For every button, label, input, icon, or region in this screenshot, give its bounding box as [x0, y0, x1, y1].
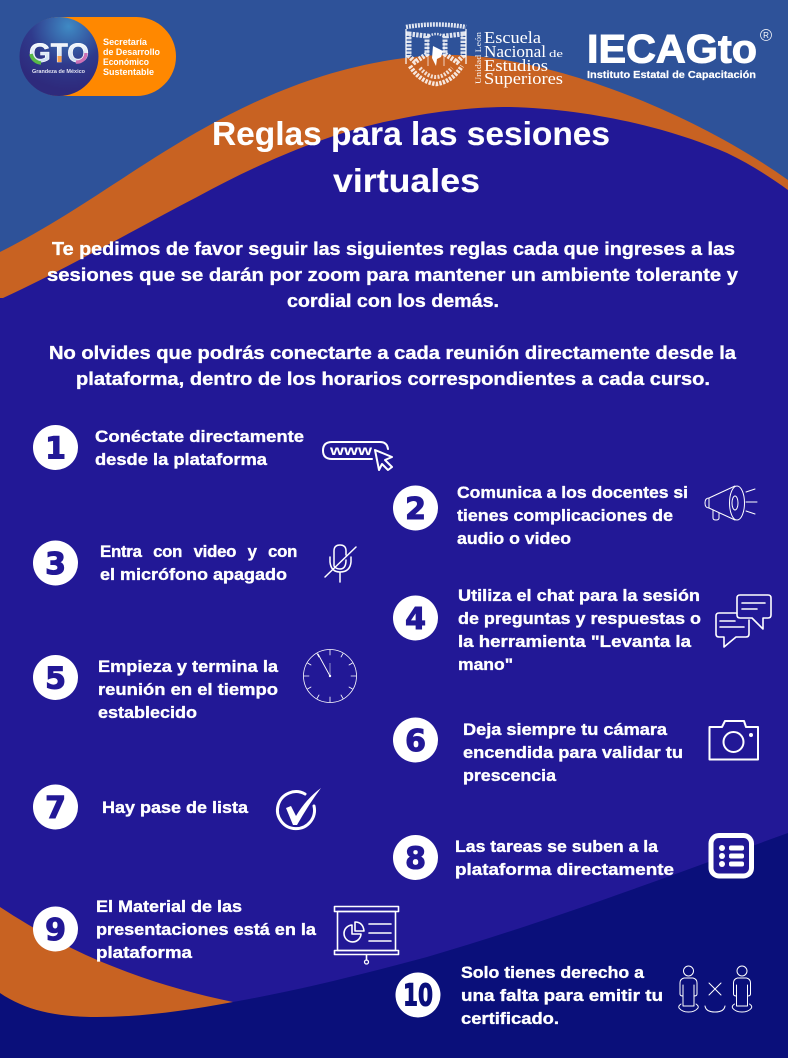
rule 5 text: reunión en el tiempo	[98, 680, 278, 699]
logo caption: Secretaría	[103, 37, 147, 47]
number 8: 8	[405, 842, 426, 876]
number 2: 2	[405, 492, 426, 527]
intro paragraph: Te pedimos de favor seguir las siguientes reglas cada que ingreses a las	[52, 239, 735, 259]
registered mark	[760, 30, 772, 40]
number 1: 1	[45, 432, 66, 466]
number 8	[393, 835, 438, 880]
number 7	[33, 784, 78, 830]
icon: list	[711, 836, 752, 876]
rule 3 text	[100, 542, 298, 584]
rule 4 text: Utiliza el chat para la sesión	[458, 586, 700, 605]
logo: UNAM Escuela Nacional de Estudios Superiores	[406, 24, 563, 88]
rule 10 text	[461, 963, 663, 1028]
school name	[484, 28, 563, 88]
title: Reglas para las sesiones	[212, 115, 610, 152]
number 5	[33, 655, 78, 700]
icon: chat bubbles	[716, 595, 771, 647]
icon: check mark	[277, 788, 321, 829]
icon: www cursor: www	[329, 442, 372, 458]
registered mark: R	[763, 31, 769, 40]
UNAM shield	[406, 24, 466, 84]
icon: camera	[710, 721, 758, 760]
number 7: 7	[45, 791, 66, 826]
rule 5 text: Empieza y termina la	[98, 657, 279, 676]
rule 9 text: plataforma	[96, 943, 193, 962]
IECAGto wordmark: IECAGto	[587, 28, 757, 72]
rule 9 text: El Material de las	[96, 897, 242, 916]
rule 5 text	[98, 657, 279, 722]
rule 10	[396, 963, 752, 1028]
GTO circle emblem: GTO	[29, 38, 89, 68]
number 10	[396, 972, 440, 1018]
icon: clock	[304, 650, 356, 702]
rule 8 text: plataforma directamente	[455, 860, 674, 879]
icon: presentation board	[334, 906, 398, 964]
number 2	[393, 486, 438, 530]
icon: two people keeping distance	[679, 966, 752, 1012]
rule 8 text	[455, 837, 674, 879]
rule 7	[33, 784, 321, 830]
rule 3	[33, 540, 356, 586]
rule 8 text: Las tareas se suben a la	[455, 837, 659, 856]
number 4	[393, 596, 438, 640]
rule 7 text: Hay pase de lista	[102, 798, 249, 817]
rule 1	[33, 425, 392, 470]
rule 2 text: audio o video	[457, 529, 571, 548]
rule 5 text: establecido	[98, 703, 197, 722]
rule 2 text: Comunica a los docentes si	[457, 483, 688, 502]
rule 5	[33, 650, 356, 722]
Unidad León vertical label: Unidad León	[474, 32, 483, 84]
logo caption: Sustentable	[103, 67, 154, 77]
rule 1 text: Conéctate directamente	[95, 427, 304, 446]
number 3: 3	[45, 547, 66, 582]
GTO circle emblem: Grandeza de México	[32, 69, 85, 75]
school name: Nacional	[484, 42, 546, 61]
rule 6 text: encendida para validar tu	[463, 743, 683, 762]
platform reminder paragraph: plataforma, dentro de los horarios correspondientes a cada curso.	[76, 369, 710, 389]
IECAGto subtitle: Instituto Estatal de Capacitación	[587, 69, 756, 81]
rule 9 text	[96, 897, 317, 962]
logo caption	[103, 37, 161, 77]
logo caption: Económico	[103, 57, 150, 67]
background: orange wave top	[0, 55, 788, 300]
rule 4 text	[458, 586, 701, 674]
rule 6 text: Deja siempre tu cámara	[463, 720, 668, 739]
number 3	[33, 540, 78, 586]
rule 4 text: la herramienta "Levanta la	[458, 632, 692, 651]
rule 6	[393, 718, 758, 785]
number 5: 5	[45, 662, 66, 696]
background: dark navy corner	[0, 833, 788, 1058]
number 6	[393, 718, 438, 762]
intro paragraph: sesiones que se darán por zoom para mantener un ambiente tolerante y	[47, 265, 738, 285]
intro paragraph: cordial con los demás.	[287, 291, 499, 311]
rule 10 text: certificado.	[461, 1009, 559, 1028]
number 9: 9	[45, 913, 66, 948]
icon: megaphone	[705, 486, 757, 520]
rule 4	[393, 586, 771, 674]
rule 3 text: el micrófono apagado	[100, 565, 287, 584]
rule 2 text: tienes complicaciones de	[457, 506, 673, 525]
title	[212, 115, 610, 199]
number 6: 6	[405, 724, 426, 759]
school name: de	[549, 48, 563, 60]
rule 3 text: Entra con video y con	[100, 542, 298, 561]
intro paragraph	[47, 239, 738, 311]
platform reminder paragraph	[49, 343, 737, 389]
logo: GTO Secretaría de Desarrollo Económico Sustentable	[20, 17, 176, 96]
rule 6 text: prescencia	[463, 766, 557, 785]
rule 2 text	[457, 483, 688, 548]
school name: Estudios	[484, 56, 548, 75]
number 9	[33, 906, 78, 952]
rule 4 text: de preguntas y respuestas o	[458, 609, 701, 628]
title: virtuales	[333, 162, 480, 199]
number 1	[33, 425, 78, 470]
rule 10 text: Solo tienes derecho a	[461, 963, 645, 982]
rule 8	[393, 835, 752, 880]
orange pill	[20, 17, 176, 96]
rule 10 text: una falta para emitir tu	[461, 986, 663, 1005]
rule 1 text	[95, 427, 304, 469]
school name: Escuela	[484, 28, 541, 47]
number 10: 10	[403, 978, 433, 1014]
logo caption: de Desarrollo	[103, 47, 161, 57]
icon: muted microphone	[325, 545, 356, 582]
GTO circle emblem	[20, 17, 98, 96]
logo: IECAGto	[587, 28, 772, 81]
background: orange wave bottom	[0, 907, 233, 1040]
rule 1 text: desde la plataforma	[95, 450, 268, 469]
platform reminder paragraph: No olvides que podrás conectarte a cada reunión directamente desde la	[49, 343, 737, 363]
icon: www cursor	[323, 442, 392, 470]
number 4: 4	[405, 602, 426, 637]
rule 4 text: mano"	[458, 655, 513, 674]
school name: Superiores	[484, 69, 563, 88]
rule 9 text: presentaciones está en la	[96, 920, 317, 939]
rule 9	[33, 897, 398, 964]
rule 2	[393, 483, 757, 548]
rule 6 text	[463, 720, 683, 785]
